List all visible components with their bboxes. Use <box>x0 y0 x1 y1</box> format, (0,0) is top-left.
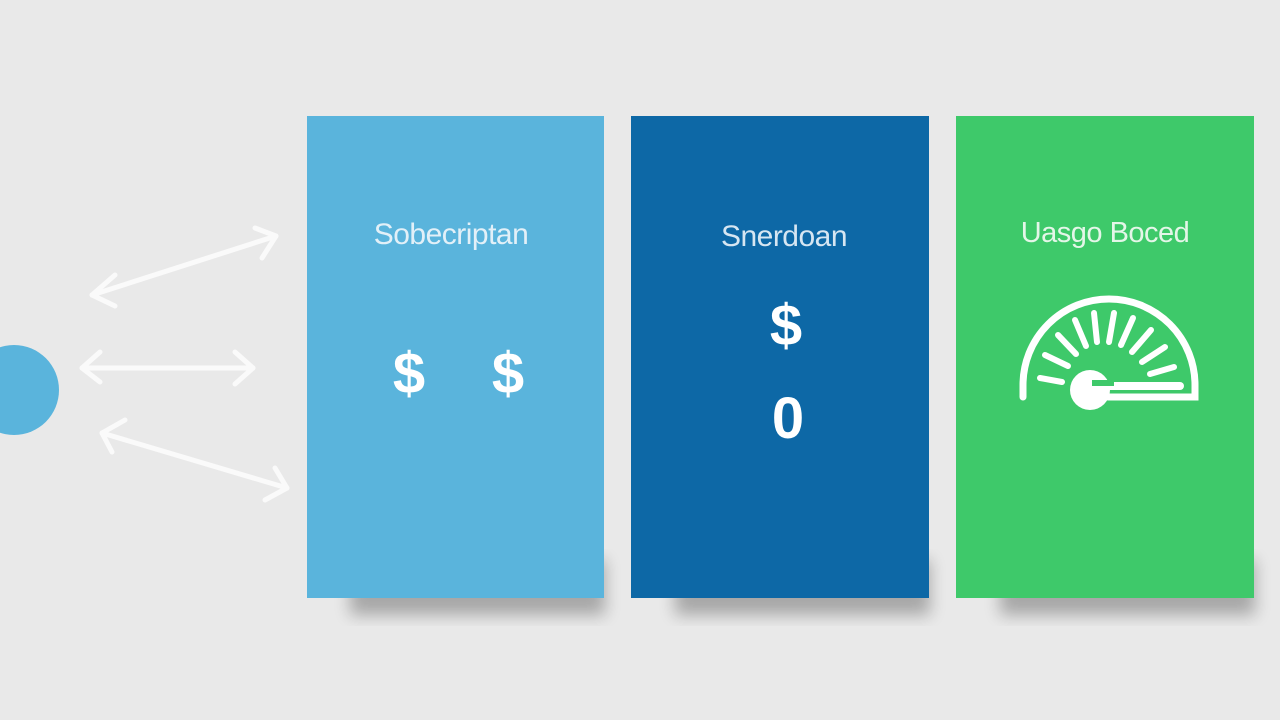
number: 0: 0 <box>772 386 804 451</box>
heading: standard: Snerdoan <box>721 220 847 253</box>
icon: gauge <box>1023 299 1195 410</box>
panel: standard <box>631 116 929 598</box>
icon: dollar signs: $ <box>393 341 425 406</box>
panel: usage based <box>956 116 1254 598</box>
icon: dollar signs <box>393 341 524 406</box>
heading: usage based: Uasgo Boced <box>1021 217 1189 249</box>
icon: blue circle <box>0 345 59 435</box>
icon: dollar: $ <box>770 293 802 358</box>
panel: subscription <box>307 116 604 598</box>
heading: subscription: Sobecriptan <box>374 218 528 251</box>
shadows <box>350 560 1255 615</box>
arrows <box>82 228 287 500</box>
arrow: bottom <box>102 420 287 500</box>
arrow: middle <box>82 352 253 384</box>
icon: dollar signs: $ <box>492 341 524 406</box>
arrow: top <box>92 228 276 306</box>
